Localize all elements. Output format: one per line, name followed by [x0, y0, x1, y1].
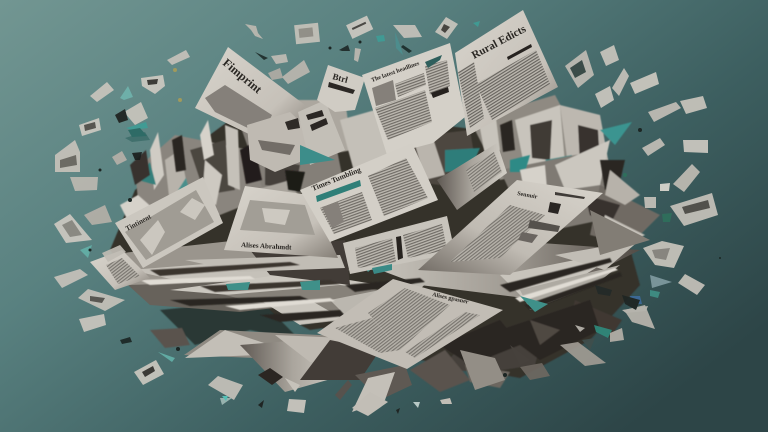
sheet: left of centre with headline [224, 186, 338, 258]
sheet: curled lower-left page [115, 177, 223, 268]
sheet: bottom centre page [317, 279, 503, 369]
flying debris: bottom [88, 40, 721, 416]
sheet: centre front page [300, 143, 438, 242]
flying papers: left [54, 50, 306, 413]
flying papers: top [245, 16, 480, 84]
sheet: centre top page [362, 43, 465, 155]
sheet: top right large page [455, 10, 558, 136]
sheet: far left lower [90, 250, 150, 290]
sheet: small headline page [317, 65, 365, 112]
teal scraps in the stack [226, 264, 548, 312]
headline: big right page: Sennuir [517, 191, 538, 201]
sheet: small upper left page [247, 112, 330, 172]
headline: small page: Btrl [331, 71, 350, 85]
pile: upper crumpled core [135, 95, 660, 245]
sheet: fold with dark rules [298, 100, 345, 165]
headline: bottom centre page: Alises gpasner [432, 292, 469, 306]
sheet: big right page [418, 180, 603, 275]
photo: centre top page [372, 80, 396, 106]
headline: lower-left page: Tintinent [124, 212, 153, 233]
sheet: upper left curved page [195, 47, 305, 150]
headline: upper left page: Fimprint [220, 56, 265, 96]
flying papers: right [520, 45, 718, 380]
pile: layered sheet stack [105, 210, 650, 412]
pile: dark underside [110, 120, 640, 392]
sheet: right of centre [437, 143, 507, 210]
sheet: below centre [343, 216, 455, 274]
pile: crumpled shards and dark gaps [120, 110, 645, 245]
headline: top right page: Rural Edicts [470, 23, 529, 62]
headline: left centre sheet: Alises Abrahmdt [241, 241, 292, 252]
headline: centre front page: Times Tumbling [310, 165, 362, 193]
headline: centre top page: The latest headlines [371, 61, 421, 84]
stack: thin page edges [140, 258, 622, 330]
